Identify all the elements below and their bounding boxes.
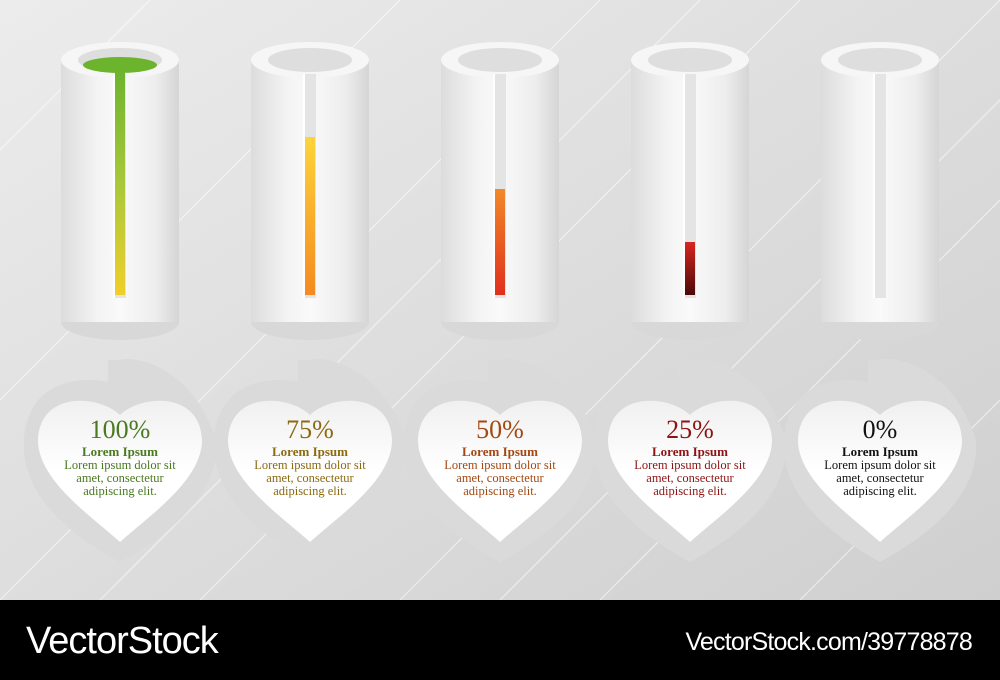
heart 50%: Lorem Ipsum bbox=[462, 444, 538, 459]
heart 100%: amet, consectetur bbox=[76, 471, 165, 485]
footer bar bbox=[0, 600, 1000, 680]
footer bar: VectorStock.com/39778878 bbox=[685, 628, 972, 656]
footer bar: VectorStock bbox=[26, 620, 220, 662]
heart 100%: 100% bbox=[90, 415, 150, 444]
heart 75%: amet, consectetur bbox=[266, 471, 355, 485]
cylinder 25% bbox=[631, 42, 749, 340]
heart 100%: Lorem ipsum dolor sit bbox=[64, 458, 176, 472]
heart 25%: 25% bbox=[666, 415, 714, 444]
heart 100%: adipiscing elit. bbox=[83, 484, 157, 498]
heart 75% bbox=[214, 359, 406, 562]
heart 25% bbox=[594, 359, 786, 562]
cylinder 75% bbox=[251, 42, 369, 340]
heart 75%: adipiscing elit. bbox=[273, 484, 347, 498]
heart 75%: Lorem ipsum dolor sit bbox=[254, 458, 366, 472]
heart 75%: Lorem Ipsum bbox=[272, 444, 348, 459]
heart 50%: amet, consectetur bbox=[456, 471, 545, 485]
heart 25%: amet, consectetur bbox=[646, 471, 735, 485]
heart 25%: adipiscing elit. bbox=[653, 484, 727, 498]
heart 0% bbox=[784, 359, 976, 562]
cylinder 50% bbox=[441, 42, 559, 340]
heart 75%: 75% bbox=[286, 415, 334, 444]
heart 100% bbox=[24, 359, 216, 562]
heart 50%: 50% bbox=[476, 415, 524, 444]
heart 0%: Lorem ipsum dolor sit bbox=[824, 458, 936, 472]
heart 50%: adipiscing elit. bbox=[463, 484, 537, 498]
heart 50%: Lorem ipsum dolor sit bbox=[444, 458, 556, 472]
cylinder 0% bbox=[821, 42, 939, 340]
cylinder 100% bbox=[61, 42, 179, 340]
heart 0%: Lorem Ipsum bbox=[842, 444, 918, 459]
heart 0%: adipiscing elit. bbox=[843, 484, 917, 498]
heart 100%: Lorem Ipsum bbox=[82, 444, 158, 459]
heart 50% bbox=[404, 359, 596, 562]
heart 25%: Lorem ipsum dolor sit bbox=[634, 458, 746, 472]
heart 25%: Lorem Ipsum bbox=[652, 444, 728, 459]
heart 0%: amet, consectetur bbox=[836, 471, 925, 485]
heart 0%: 0% bbox=[863, 415, 897, 444]
